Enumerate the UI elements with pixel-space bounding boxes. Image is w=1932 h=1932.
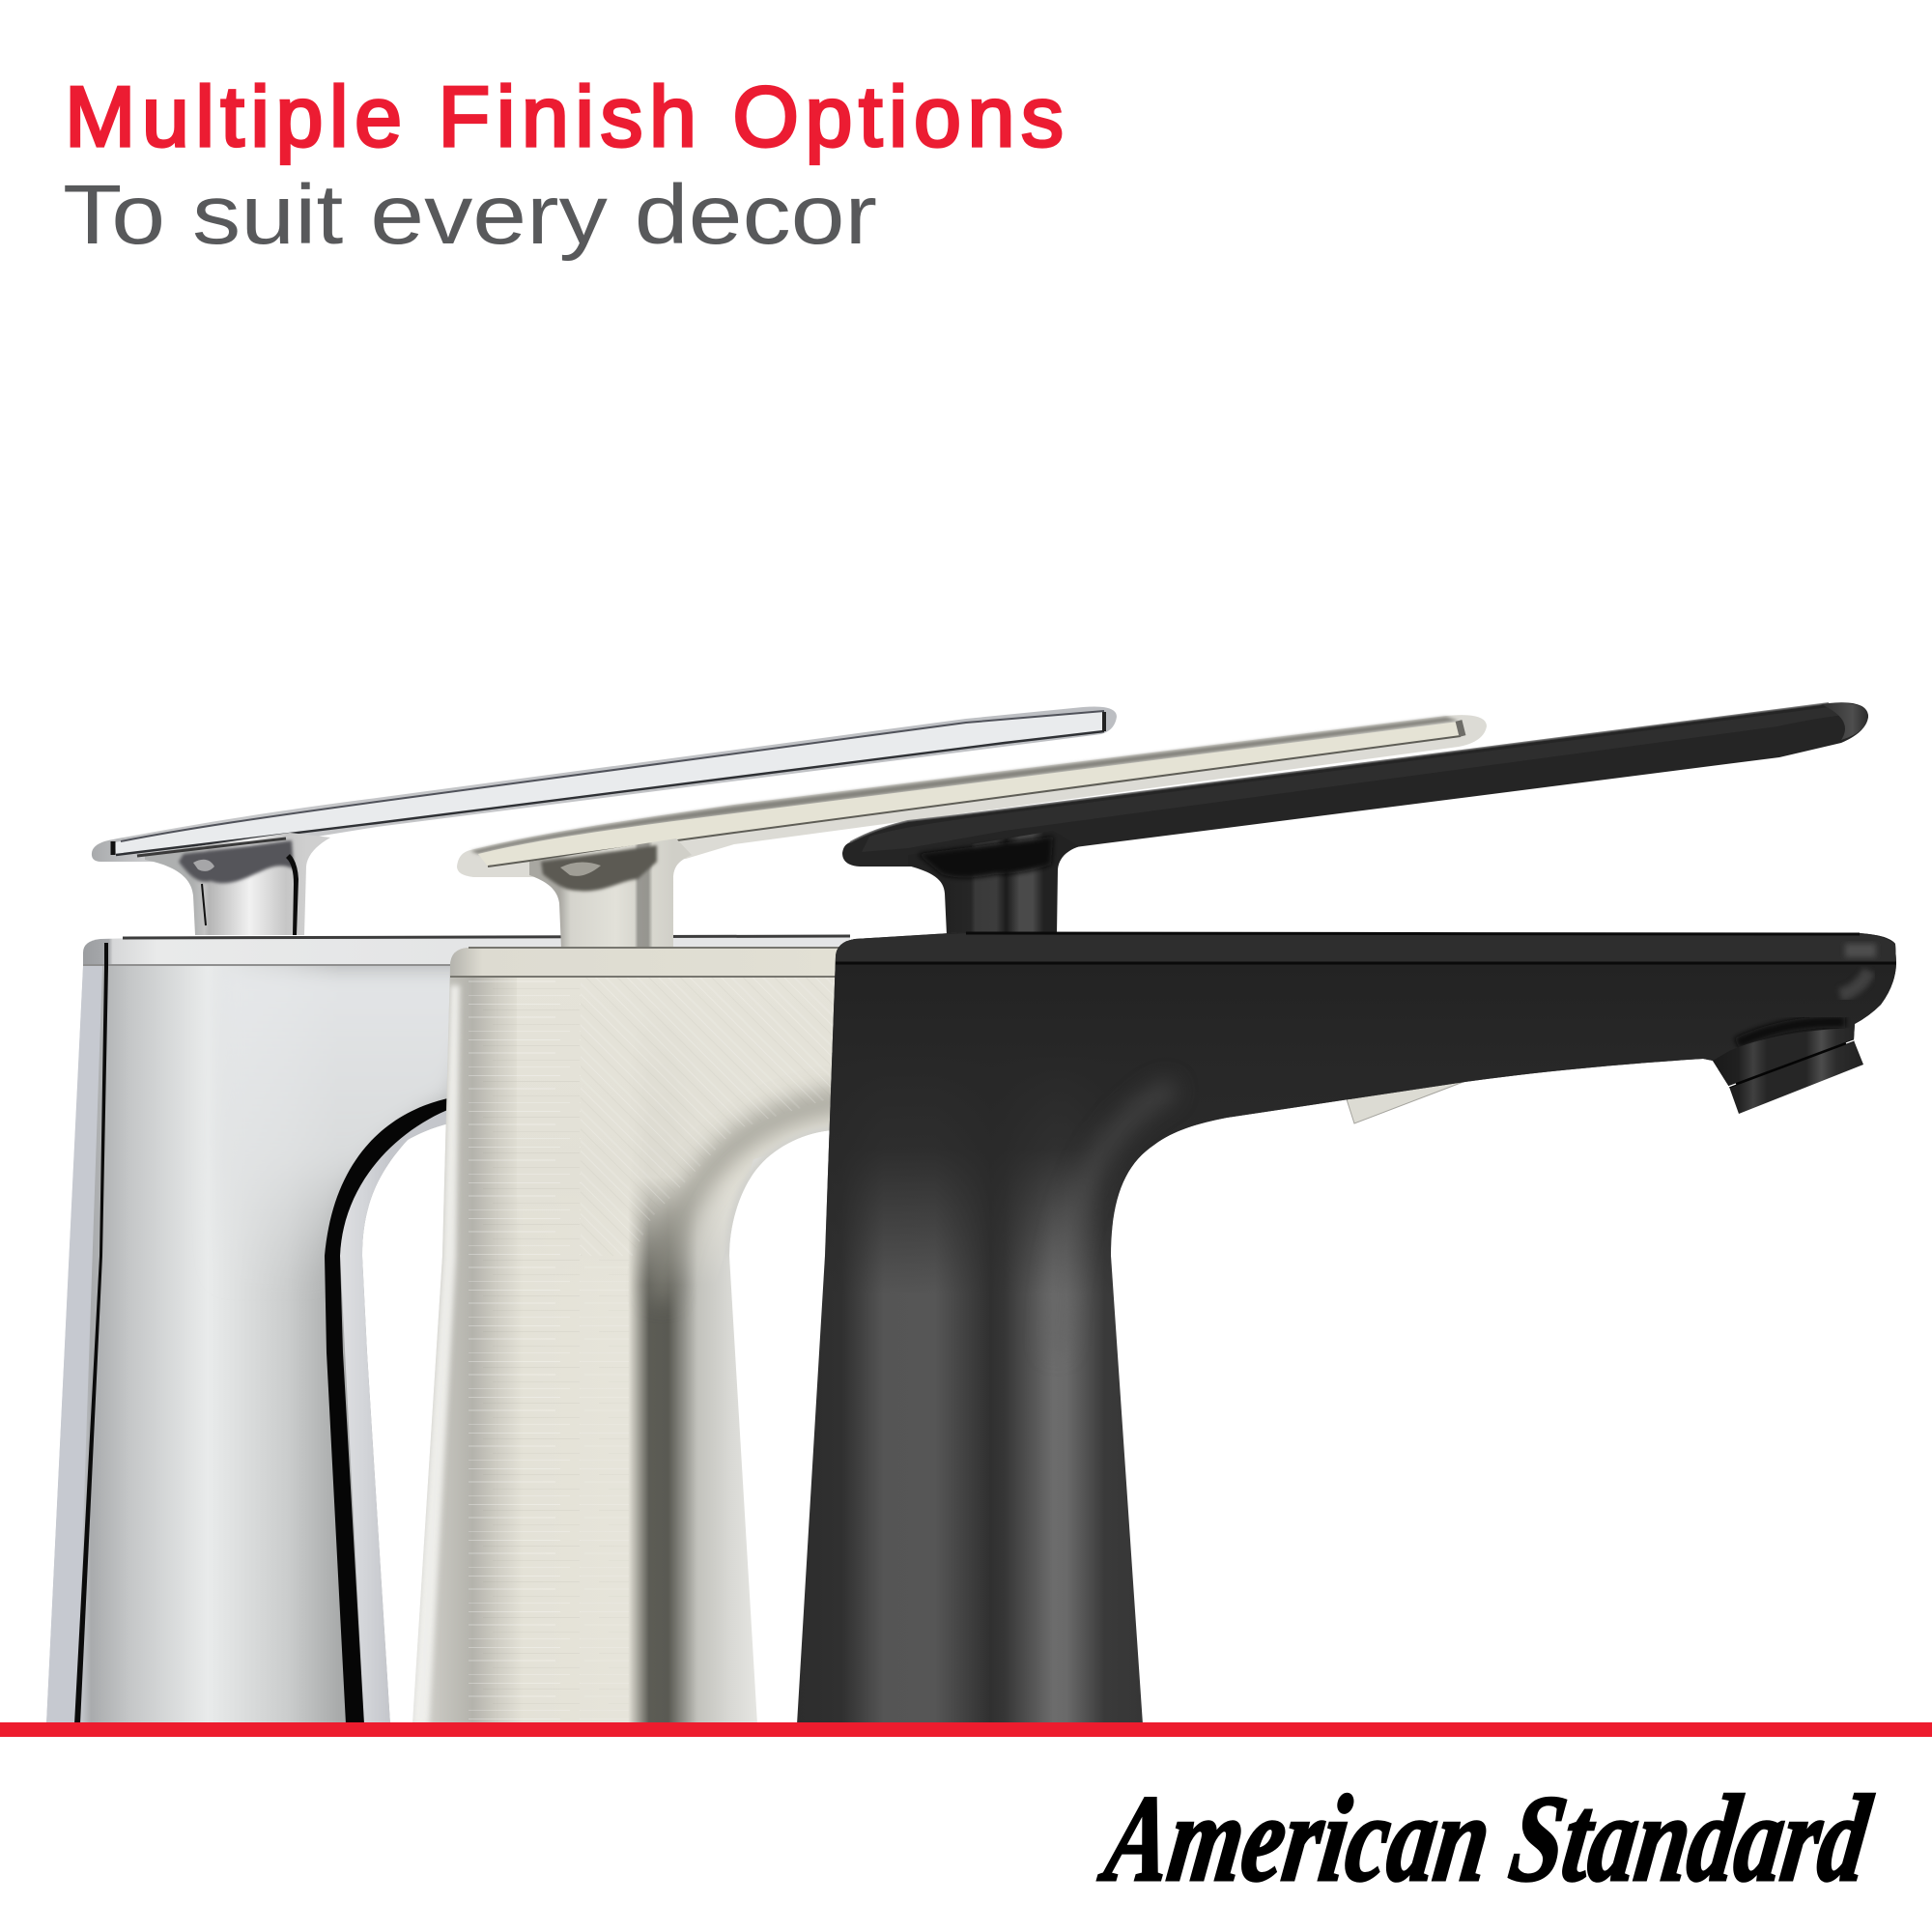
red divider bar [0,1722,1932,1737]
brushed upper surface and grain [412,977,850,1724]
chrome lever post [137,833,330,935]
black body and spout [797,932,1896,1724]
subtitle: To suit every decor [63,168,877,262]
brushed body [412,948,850,1724]
chrome body [46,966,483,1724]
brushed lever post [529,838,692,949]
chrome upper sheen [46,966,493,1724]
title: Multiple Finish Options [65,69,1064,164]
chrome top plate [83,936,850,965]
faucet: polished chrome finish [46,706,1117,1724]
black plate lines [836,933,1896,963]
black lever handle [842,702,1868,867]
brushed lever handle [457,715,1487,877]
black plate highlight [1845,944,1876,957]
black top plate [836,933,1896,963]
black lever post [908,831,1080,935]
faucet: brushed nickel finish [412,715,1487,1724]
black upper shading [824,932,1896,1281]
brushed top plate [450,948,850,977]
faucet: matte black finish [797,702,1903,1724]
brushed nickel spout nub [1347,1080,1468,1123]
brushed plate lines [450,948,850,977]
chrome lever handle [92,706,1117,862]
chrome dark reflection lines [74,936,850,1724]
black aerator [1713,1028,1863,1114]
